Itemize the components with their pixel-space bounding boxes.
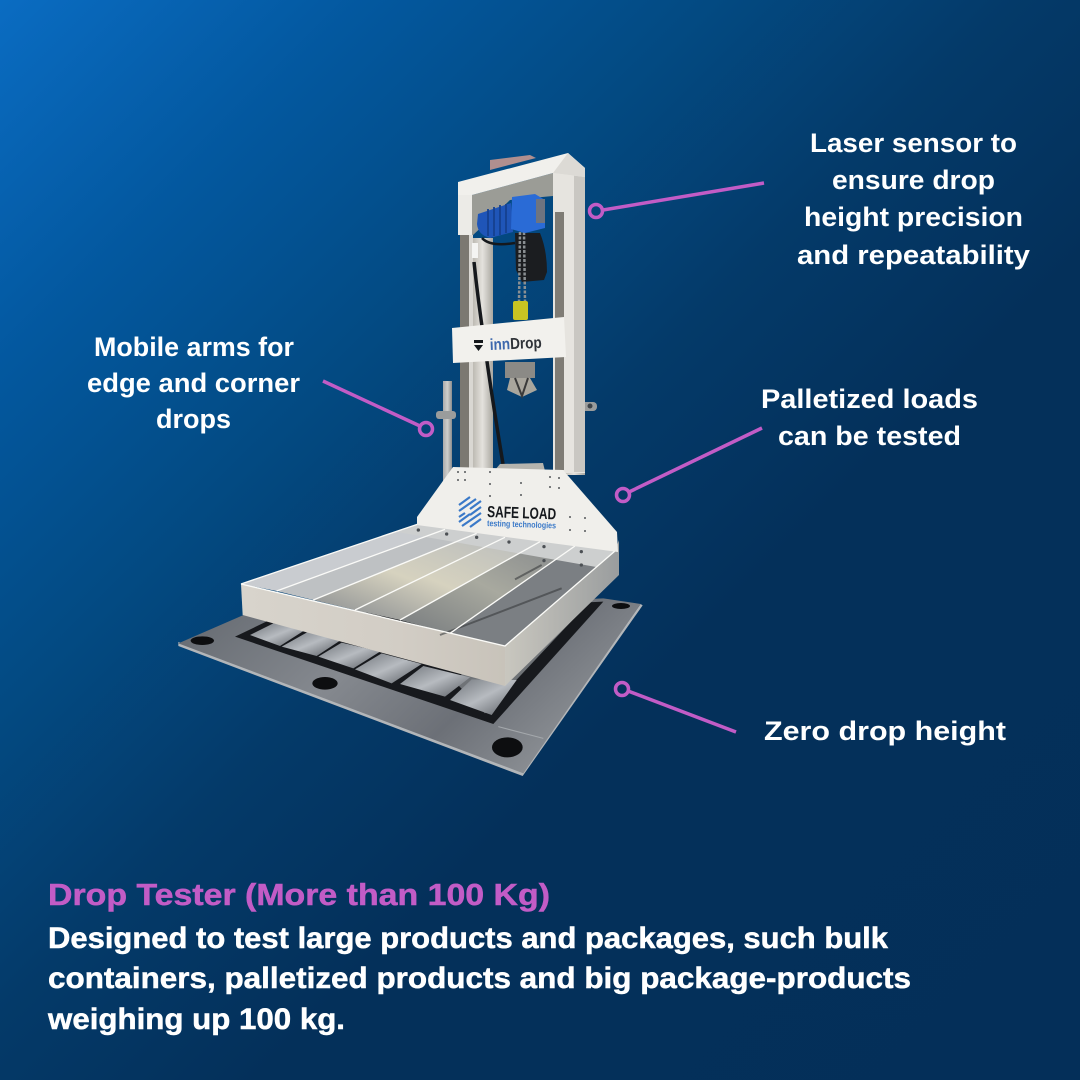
safe load tagline: testing technologies: [487, 518, 556, 530]
hoist frame: [458, 153, 585, 473]
innDrop sign: innDrop: [489, 335, 542, 354]
callout text: palletized loads: Palletized loads: [761, 384, 978, 414]
callout text: palletized loads: [761, 384, 978, 451]
safe load wordmark: SAFE LOAD: [487, 504, 556, 523]
rear mobile arm post left: [436, 381, 456, 526]
heading: Drop Tester (More than 100 Kg): [48, 877, 550, 912]
callout text: mobile arms: drops: [156, 404, 231, 434]
description text: containers, palletized products and big package-products: [48, 962, 911, 995]
description text: [47, 922, 911, 1036]
callout text: laser sensor: Laser sensor to: [810, 128, 1017, 158]
callout text: zero drop height: Zero drop height: [764, 716, 1006, 746]
description text: Designed to test large products and packages, such bulk: [48, 922, 888, 955]
callout: palletized loads: [616, 384, 978, 502]
safe load panel: [417, 463, 618, 552]
cable: [474, 262, 503, 464]
callout connector: mobile arms: [323, 381, 432, 436]
callout text: laser sensor: height precision: [804, 202, 1023, 232]
callout text: laser sensor: ensure drop: [832, 165, 995, 195]
callout connector: zero drop height: [616, 682, 736, 732]
safe load logo icon: [459, 497, 481, 527]
rubber blocks: [250, 623, 517, 715]
callout text: laser sensor: and repeatability: [797, 240, 1030, 270]
callout: laser sensor: [590, 128, 1030, 270]
mounting holes: [191, 603, 630, 757]
callout connector: palletized loads: [616, 428, 762, 502]
tray compartments: [241, 524, 445, 591]
innDrop sign: [452, 317, 566, 363]
description text: weighing up 100 kg.: [47, 1003, 345, 1036]
callout connector: laser sensor: [590, 183, 764, 218]
rear mobile arm post right: [563, 375, 597, 475]
base plate: [178, 598, 643, 776]
callout text: mobile arms: [87, 332, 300, 434]
tray back wall: [395, 524, 615, 567]
callout text: mobile arms: Mobile arms for: [94, 332, 294, 362]
callout text: palletized loads: can be tested: [778, 421, 961, 451]
callout text: mobile arms: edge and corner: [87, 368, 300, 398]
callout text: laser sensor: [797, 128, 1030, 270]
loading tray: [241, 524, 619, 686]
electric chain hoist: [477, 194, 547, 320]
shock absorber recess: [235, 602, 603, 724]
callout: mobile arms: [87, 332, 432, 436]
gripper: [505, 362, 537, 397]
machine: drop tester photo illustration: [178, 153, 643, 776]
callout: zero drop height: [616, 682, 1006, 746]
